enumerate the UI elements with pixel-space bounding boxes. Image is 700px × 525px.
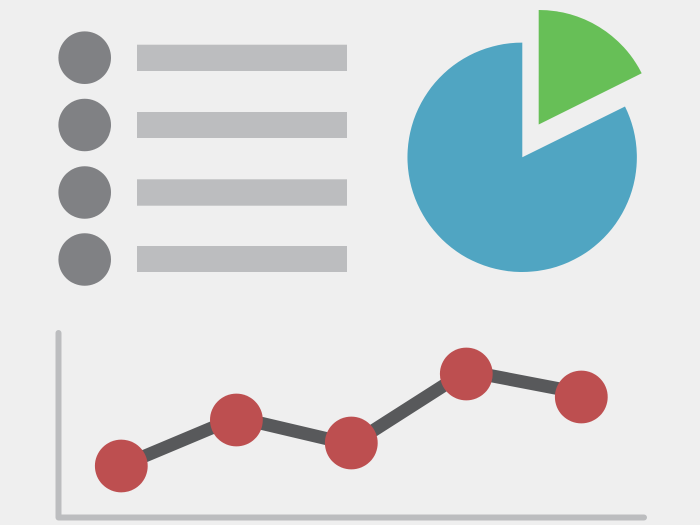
pie chart — [407, 10, 642, 272]
list row 4 — [58, 233, 347, 286]
list row 2 — [58, 99, 347, 151]
data point 1 — [95, 440, 148, 492]
pie green slice — [539, 10, 642, 125]
trend line — [122, 371, 581, 466]
pie main slice — [407, 43, 637, 272]
list row 1 — [58, 31, 347, 84]
data point 4 — [440, 348, 493, 400]
panel: list — [58, 31, 347, 286]
list row 3 — [58, 166, 347, 219]
chart axes — [58, 333, 644, 518]
data point 2 — [210, 394, 263, 446]
data point 3 — [325, 417, 378, 469]
line chart — [58, 333, 644, 518]
data point 5 — [555, 371, 608, 423]
